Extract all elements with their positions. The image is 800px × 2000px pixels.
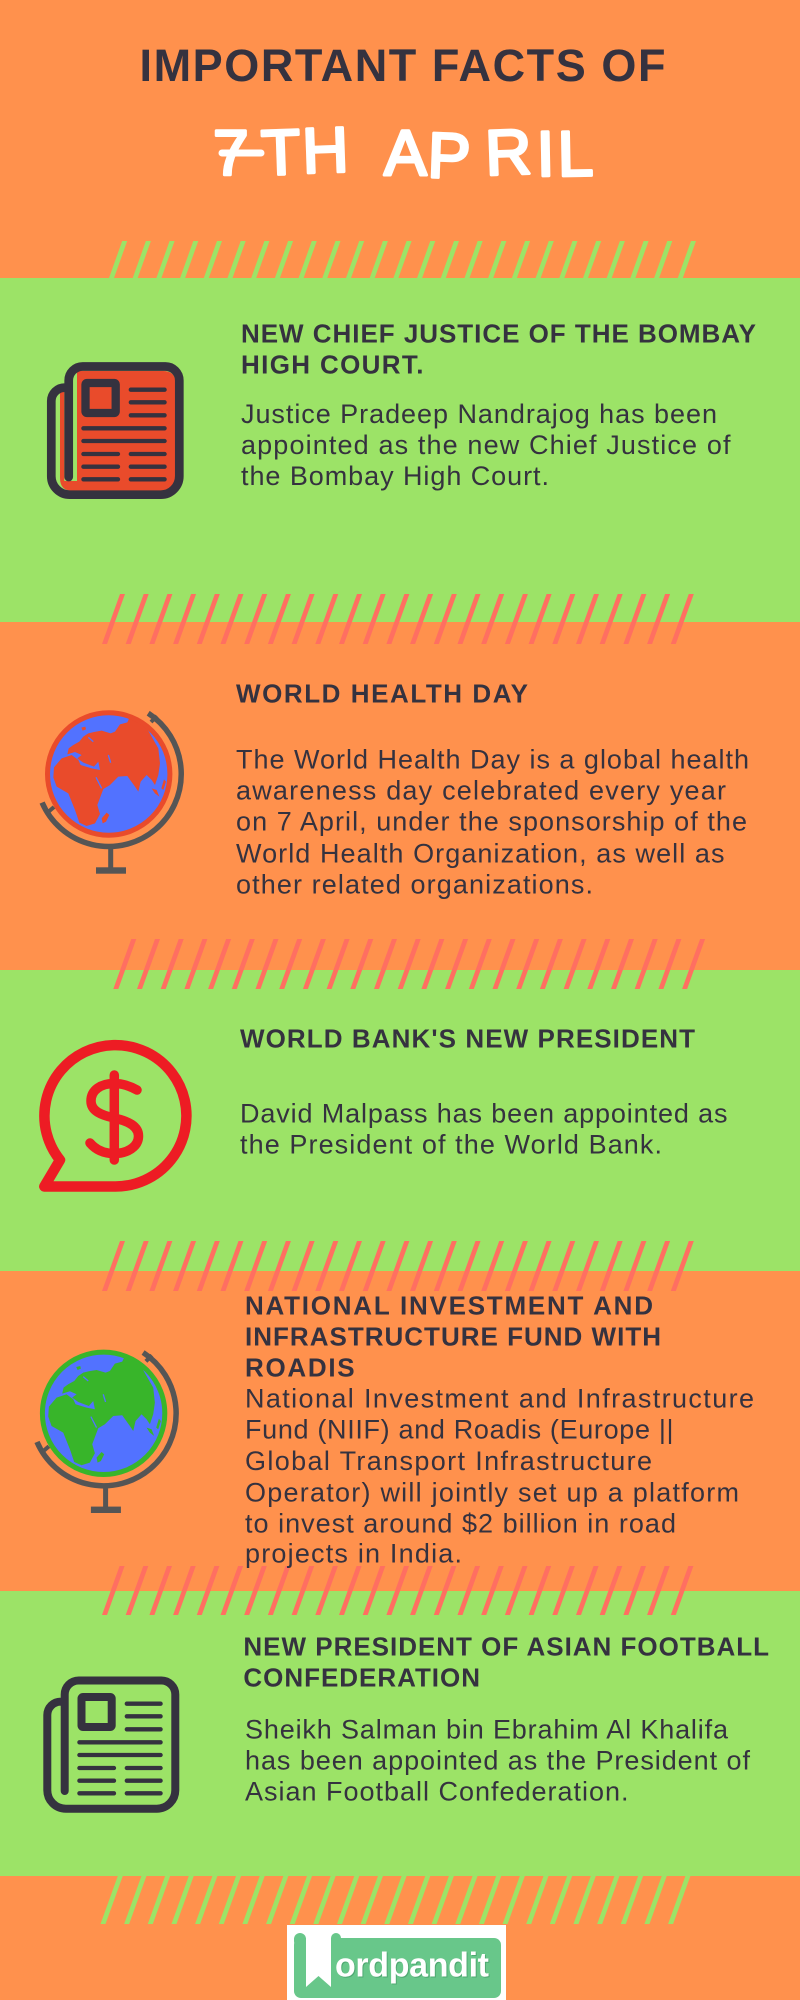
heading: national investment: ROADIS [245, 1353, 355, 1383]
body text: world health day: awareness day celebrated every year [236, 776, 726, 806]
icon: outline newspaper [47, 1680, 175, 1809]
logo: Wordpandit: ordpandit [335, 1947, 489, 1985]
body text: asian football: Asian Football Confederation. [245, 1777, 628, 1807]
icon: red newspaper [51, 366, 179, 495]
panel: Bombay High Court chief justice [0, 278, 800, 594]
body text: new chief justice: Justice Pradeep Nandrajog has been [241, 399, 717, 429]
heading: new chief justice: NEW CHIEF JUSTICE OF THE BOMBAY [241, 318, 756, 348]
panel: World Health Day [0, 643, 800, 939]
title: important facts of: IMPORTANT FACTS OF [140, 40, 666, 91]
panel: National Investment and Infrastructure Fund [0, 1291, 800, 1569]
heading: world health day: WORLD HEALTH DAY [236, 679, 528, 709]
icon: green and blue globe [37, 1352, 176, 1513]
icon: red and blue globe [42, 713, 181, 874]
heading: world bank: WORLD BANK'S NEW PRESIDENT [240, 1024, 695, 1054]
body text: asian football: has been appointed as the President of [245, 1745, 750, 1775]
body text: national investment: projects in India. [245, 1539, 462, 1569]
body text: world health day: on 7 April, under the sponsorship of the [236, 807, 747, 837]
body text: national investment: National Investment and Infrastructure [245, 1384, 754, 1414]
panel: Asian Football Confederation president [0, 1615, 800, 1876]
body text: world health day: other related organizations. [236, 869, 593, 899]
body text: world health day: The World Health Day is a global health [236, 745, 749, 775]
icon: dollar speech bubble [44, 1045, 186, 1186]
body text: world bank: David Malpass has been appointed as [240, 1099, 728, 1129]
body text: national investment: to invest around $2 billion in road [245, 1509, 676, 1539]
heading: national investment: INFRASTRUCTURE FUND WITH [245, 1322, 661, 1352]
body text: new chief justice: the Bombay High Court. [241, 461, 549, 491]
title panel [0, 0, 800, 241]
body text: national investment: Operator) will jointly set up a platform [245, 1477, 739, 1507]
heading: asian football: NEW PRESIDENT OF ASIAN FOOTBALL [243, 1632, 769, 1662]
heading: new chief justice: HIGH COURT. [241, 349, 424, 379]
body text: new chief justice: appointed as the new Chief Justice of [241, 430, 731, 460]
heading: asian football: CONFEDERATION [243, 1663, 480, 1693]
body text: national investment: Global Transport Infrastructure [245, 1446, 652, 1476]
body text: national investment: Fund (NIIF) and Roadis (Europe || [245, 1415, 674, 1445]
title: 7th April: 7TH APRIL [213, 113, 594, 192]
body text: asian football: Sheikh Salman bin Ebrahim Al Khalifa [245, 1714, 729, 1744]
body text: world health day: World Health Organization, as well as [236, 838, 724, 868]
panel: World Bank president [0, 989, 800, 1241]
heading: national investment: NATIONAL INVESTMENT AND [245, 1291, 653, 1321]
body text: world bank: the President of the World Bank. [240, 1130, 662, 1160]
logo: Wordpandit: ordpandit [336, 1948, 490, 1986]
logo: Wordpandit [287, 1925, 506, 2000]
